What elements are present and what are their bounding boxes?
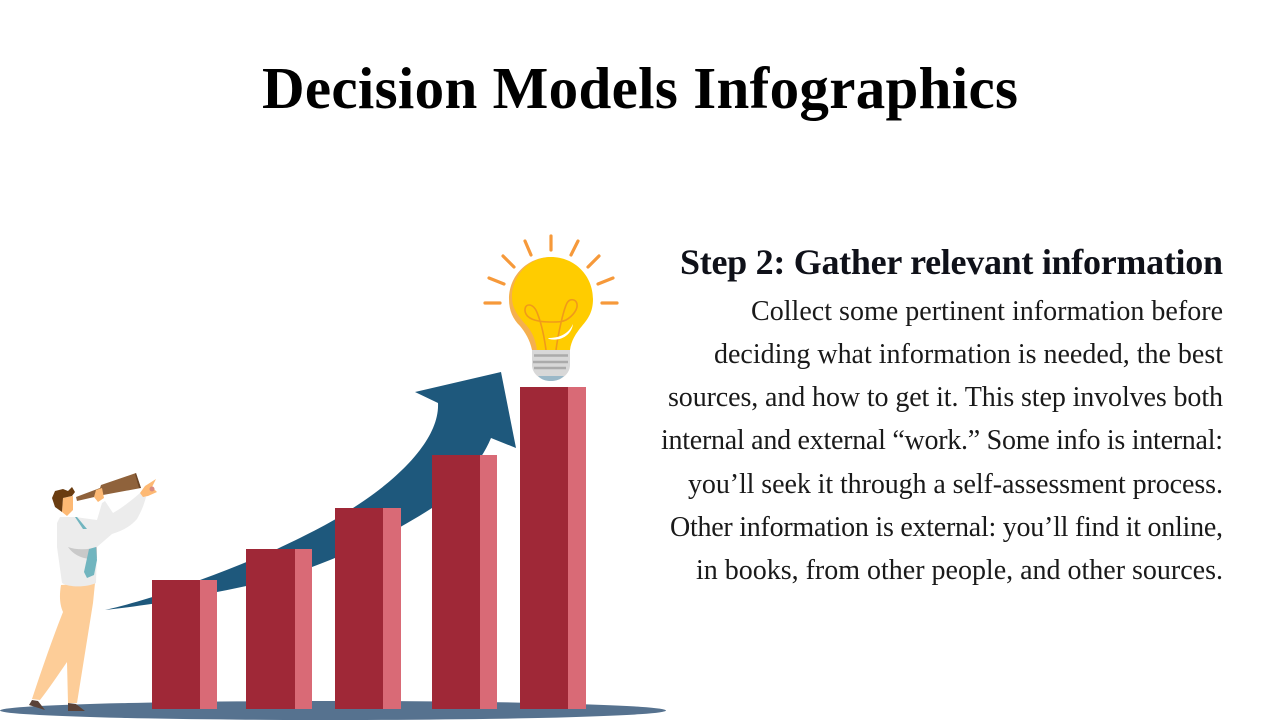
bar chart — [152, 387, 586, 709]
head — [62, 496, 73, 516]
bar 3 — [335, 508, 401, 709]
step description: in books, from other people, and other sources. — [696, 555, 1223, 586]
step heading: Step 2: Gather relevant information — [680, 242, 1223, 282]
step text block — [661, 242, 1223, 586]
step description: you’ll seek it through a self-assessment process. — [688, 469, 1223, 500]
pointing hand — [140, 479, 157, 497]
icon: light bulb — [485, 236, 617, 381]
arrow — [105, 372, 516, 610]
bar 5 — [520, 387, 586, 709]
bar 4 — [432, 455, 497, 709]
step description: Other information is external: you’ll find it online, — [670, 512, 1223, 543]
bar 1 — [152, 580, 217, 709]
bulb glass — [512, 257, 593, 350]
hand on telescope — [94, 488, 104, 502]
ground ellipse — [0, 701, 666, 720]
trousers — [32, 583, 95, 703]
bulb highlight — [548, 324, 573, 340]
bulb rays — [485, 236, 617, 303]
step description — [661, 296, 1223, 586]
tie — [75, 517, 97, 578]
bulb glass shadow — [509, 257, 551, 350]
figure: man with telescope — [29, 473, 157, 711]
telescope — [76, 473, 141, 501]
hair — [52, 487, 75, 512]
step description: deciding what information is needed, the best — [714, 339, 1223, 370]
bulb base — [532, 350, 570, 381]
bar 2 — [246, 549, 312, 709]
step description: sources, and how to get it. This step involves both — [668, 382, 1223, 413]
arm fold shadow — [68, 547, 97, 559]
step description: Collect some pertinent information before — [751, 296, 1223, 327]
filament — [525, 300, 577, 350]
shirt — [57, 493, 146, 586]
step description: internal and external “work.” Some info is internal: — [661, 425, 1223, 456]
title: Decision Models Infographics — [262, 55, 1018, 121]
shoes — [29, 700, 85, 711]
